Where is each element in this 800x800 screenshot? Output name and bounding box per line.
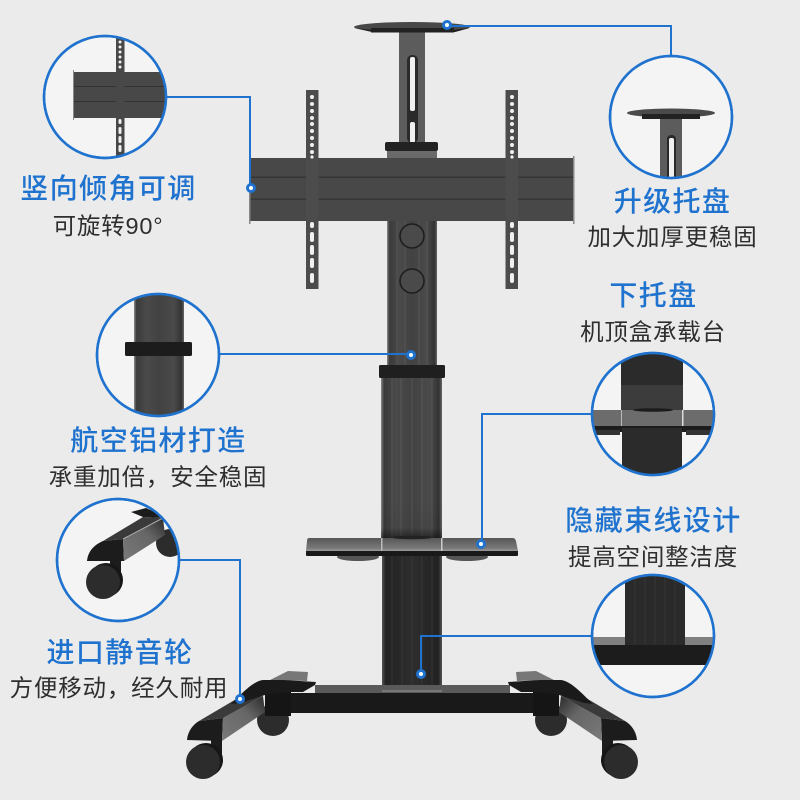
heading: 竖向倾角可调 bbox=[20, 173, 197, 204]
subtext: 承重加倍，安全稳固 bbox=[49, 464, 267, 490]
leader line bbox=[482, 414, 592, 543]
callout: lower tray bbox=[478, 280, 726, 548]
subtext: 方便移动，经久耐用 bbox=[10, 675, 228, 701]
marker dot bbox=[248, 184, 254, 192]
detail circle bbox=[57, 499, 184, 621]
lower shelf bbox=[306, 536, 518, 561]
subtext: 加大加厚更稳固 bbox=[587, 224, 758, 250]
marker dot bbox=[236, 696, 244, 702]
subtext: 机顶盒承载台 bbox=[580, 319, 726, 345]
subtext: 可旋转90° bbox=[53, 213, 163, 239]
top tray bbox=[354, 22, 470, 32]
detail circle bbox=[44, 30, 169, 165]
callout: upgraded tray bbox=[444, 22, 758, 250]
callout: silent casters bbox=[10, 499, 244, 702]
upper column bbox=[387, 215, 437, 367]
lower column bbox=[381, 376, 442, 692]
heading: 隐藏束线设计 bbox=[565, 505, 742, 536]
detail circle bbox=[610, 56, 732, 180]
top tray post bbox=[385, 30, 438, 159]
callout: vertical tilt bbox=[20, 30, 254, 239]
subtext: 提高空间整洁度 bbox=[568, 544, 738, 570]
left VESA bracket bbox=[306, 90, 318, 289]
TV cart product bbox=[186, 22, 638, 779]
leader line bbox=[421, 636, 592, 673]
right leg and casters bbox=[508, 671, 638, 779]
heading: 下托盘 bbox=[609, 280, 698, 311]
heading: 进口静音轮 bbox=[46, 637, 194, 668]
marker dot bbox=[444, 22, 450, 28]
heading: 航空铝材打造 bbox=[70, 425, 247, 456]
detail circle bbox=[590, 570, 716, 697]
marker dot bbox=[418, 670, 424, 678]
leader line bbox=[180, 560, 240, 698]
leader line bbox=[447, 26, 671, 56]
detail circle bbox=[590, 350, 716, 478]
column collar bbox=[379, 365, 445, 378]
left leg and casters bbox=[186, 671, 316, 779]
leader line bbox=[167, 97, 250, 187]
callout: aviation aluminium bbox=[49, 290, 414, 490]
heading: 升级托盘 bbox=[614, 186, 731, 217]
right VESA bracket bbox=[506, 90, 518, 289]
wheeled base bbox=[186, 671, 638, 779]
marker dot bbox=[408, 352, 414, 358]
callout: hidden cable routing bbox=[418, 505, 742, 697]
marker dot bbox=[478, 540, 484, 548]
detail circle bbox=[97, 290, 219, 420]
leader line bbox=[220, 353, 410, 355]
mounting bar bbox=[249, 156, 574, 224]
